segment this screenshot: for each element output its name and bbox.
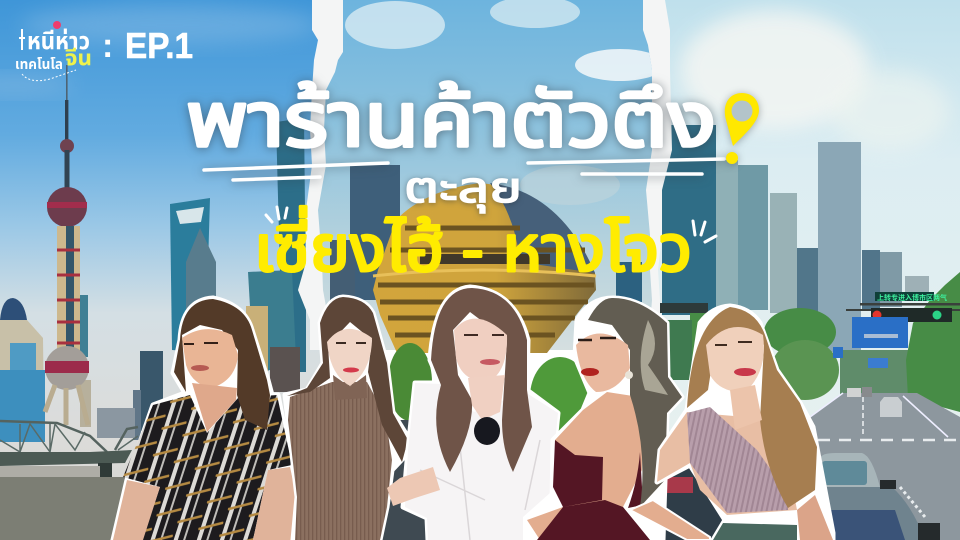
logo title line two: เทคโนโล: [15, 56, 63, 72]
building: Jin Mao tower: [186, 228, 216, 345]
silhouette outline: [285, 297, 408, 540]
subtitle: ตะลุย: [404, 164, 522, 213]
hair: [687, 307, 817, 508]
sweater: [288, 382, 392, 540]
road: [810, 393, 960, 540]
building: Shanghai Tower: [270, 118, 306, 372]
person: second woman in brown turtleneck: [285, 297, 408, 540]
episode number: EP.1: [125, 25, 193, 66]
trees: [658, 272, 960, 412]
person: left woman in chain-print dress: [113, 298, 300, 540]
earring: [625, 371, 633, 379]
icon: overhead traffic signal and signs: [833, 292, 960, 368]
colon: :: [102, 27, 113, 65]
panel: center torn strip with Hangzhou golden dome: [298, 0, 680, 350]
person: center woman in white blouse: [387, 287, 558, 540]
icon: flight path: [22, 70, 76, 81]
icon: Waibaidu bridge: [0, 421, 138, 477]
silhouette outline: [113, 298, 300, 540]
icon: map pin: [53, 21, 61, 29]
icon: sparkle left: [266, 207, 287, 222]
car: foreground cars: [820, 453, 880, 490]
face: [706, 327, 764, 392]
icon: overhead traffic signal and signs: 上转专进入博市区两气: [877, 293, 947, 302]
icon: sparkle right: [693, 221, 716, 242]
building: dark highrises behind dome: [350, 165, 400, 300]
face: [454, 319, 507, 382]
river: [0, 477, 345, 540]
hair: [287, 297, 408, 462]
logo: show name: [15, 21, 92, 81]
main title: พาร้านค้าตัวตึง: [186, 78, 716, 163]
title underline right: [528, 159, 724, 174]
dress: [123, 395, 292, 540]
face: [576, 334, 630, 392]
hands: [387, 467, 440, 506]
face: [327, 329, 372, 386]
forearm with watch: [630, 500, 710, 540]
icon: Oriental Pearl Tower: [45, 65, 89, 425]
silhouette outline: [657, 306, 833, 540]
logo accent word: จีน: [65, 47, 92, 70]
blouse: [405, 383, 558, 540]
main title: [186, 78, 724, 180]
pleated top: [687, 407, 788, 513]
jeans: [713, 523, 797, 540]
panel: right sky and Hangzhou street: [640, 0, 960, 540]
building: river-side towers: [140, 351, 163, 431]
hair: [588, 298, 682, 507]
building: towers row: [662, 125, 716, 315]
logo title line one: หนีห่าว: [27, 27, 90, 55]
title underline left: [204, 163, 388, 180]
arms and midriff: [657, 412, 797, 515]
face and neck: [182, 329, 238, 388]
panel: left sky and Shanghai skyline: [0, 0, 345, 540]
person: right woman in mauve top: [657, 306, 833, 540]
icon: golden dome building: [373, 183, 596, 353]
icon: black rose brooch: [474, 417, 500, 445]
episode label: [102, 25, 193, 66]
icon: yellow location pin: [725, 93, 759, 164]
hair: [174, 299, 270, 430]
building: Shanghai World Financial Center: [170, 198, 210, 352]
destination headline: เซี่ยงไฮ้ - หางโจว: [254, 206, 692, 285]
car: white sedan ahead: [880, 397, 902, 417]
skin shoulders and arm: [527, 392, 645, 540]
velvet dress: [537, 440, 650, 540]
hair: [431, 288, 532, 472]
trees beside dome: [380, 343, 730, 540]
building: tall glass tower: [818, 142, 861, 352]
arms: [113, 467, 300, 540]
silhouette outline: [527, 298, 682, 540]
silhouette outline: [403, 287, 558, 540]
building: left domed cluster: [0, 320, 44, 420]
person: fourth woman in burgundy velvet: [527, 298, 710, 540]
icon: tower in logo: [19, 29, 25, 50]
